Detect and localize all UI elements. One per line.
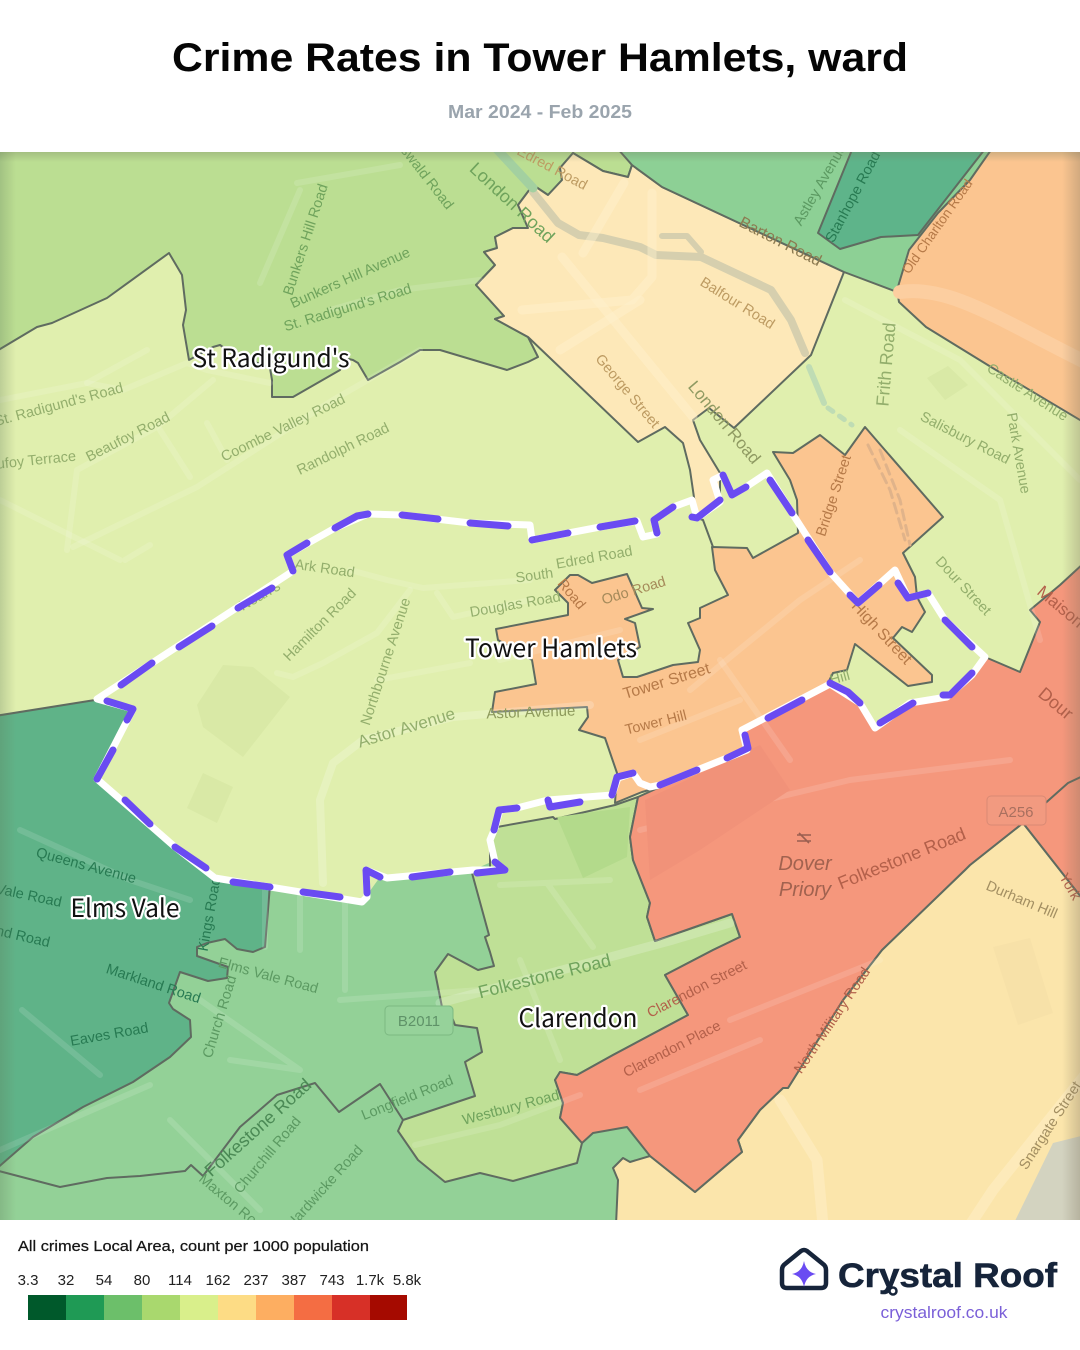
legend tick values [18, 1272, 422, 1289]
area: pale orange town ward [476, 153, 844, 518]
rail tracks in peach [868, 445, 910, 545]
road: Markland Road: Markland Road [104, 961, 202, 1007]
road: Edred Road south: Edred Road [555, 543, 634, 573]
road: Folkestone Road east: Folkestone Road [835, 824, 969, 893]
legend tick values: 5.8k [393, 1272, 422, 1289]
ward label: Elms Vale: Elms Vale [70, 889, 180, 925]
Tower Hamlets ward boundary [97, 473, 985, 902]
legend tick values: 32 [58, 1272, 74, 1289]
peach park path [900, 291, 1080, 362]
road: Eaves Road: Eaves Road [69, 1020, 150, 1050]
road shield: A256 [987, 796, 1046, 825]
area: peach Tower Hamlets part [492, 427, 943, 803]
legend title: All crimes Local Area, count per 1000 population [18, 1238, 369, 1255]
river through town [533, 192, 805, 353]
road: Astley Avenue: Astley Avenue [791, 141, 850, 229]
minor streets [0, 165, 1080, 1210]
road: Northbourne Avenue: Northbourne Avenue [358, 596, 414, 727]
river upstream in green ward [493, 145, 533, 188]
area: dark green Stanhope ward [817, 152, 984, 250]
Clarendon park patch [557, 807, 630, 878]
road: Longfield Road: Longfield Road [359, 1073, 456, 1124]
icon: railway station [797, 833, 811, 843]
road: Bridge Street: Bridge Street [814, 453, 855, 538]
road: Churchill Road: Churchill Road [231, 1114, 305, 1197]
road: Astor Avenue east: Astor Avenue [486, 702, 576, 723]
road: Folkestone Road west: Folkestone Road [201, 1075, 315, 1181]
road: London Road centre: London Road [684, 377, 764, 468]
road: South Road: South [515, 565, 554, 587]
road: High Street: High Street [848, 598, 915, 668]
Priory dark patch [646, 792, 786, 832]
road: Clarendon Place: Clarendon Place [621, 1018, 724, 1081]
road: Folkestone Road centre: Folkestone Road [476, 950, 613, 1002]
website url: crystalroof.co.uk [880, 1304, 1008, 1322]
road: Douglas Road: Douglas Road [469, 589, 562, 621]
map edge vignette [0, 152, 1080, 1220]
road: Edred Road north: Edred Road [514, 143, 590, 194]
ward label: Tower Hamlets: Tower Hamlets [465, 629, 637, 665]
road: Frith Road: Frith Road [872, 322, 900, 407]
area: medium green north ward [619, 152, 988, 292]
map base: light green wards [0, 254, 1080, 898]
road: Queens Avenue: Queens Avenue [34, 845, 138, 887]
ward label: St Radigund's: St Radigund's [192, 339, 350, 375]
area: ward line to the east edge [1046, 776, 1080, 804]
road: Dour Street: Dour Street [932, 554, 994, 619]
road shield: A256: A256 [998, 804, 1034, 821]
area: Clarendon light green ward [398, 797, 740, 1182]
legend colour scale [28, 1295, 407, 1320]
boundary dashes [97, 475, 972, 897]
station: Dover Priory [778, 833, 833, 901]
road: Clarendon Street: Clarendon Street [645, 957, 750, 1021]
legend [18, 1238, 422, 1320]
boundary casing [97, 473, 985, 902]
wordmark: Crystal Roof [838, 1257, 1058, 1295]
ward name labels [70, 339, 638, 1035]
legend tick values: 1.7k [356, 1272, 385, 1289]
icon: house with star [782, 1250, 826, 1288]
road: Kings Road: Kings Road [196, 876, 224, 953]
road shield: B2011: B2011 [398, 1013, 440, 1030]
road: Castle Avenue: Castle Avenue [984, 361, 1071, 425]
road: Church Road: Church Road [200, 974, 240, 1060]
logo: Crystal Roof [782, 1250, 1058, 1322]
river channel [662, 236, 701, 252]
area: Elms Vale dark green ward [0, 700, 270, 1170]
station name second line: Priory [779, 879, 832, 901]
road: Coombe Valley Road: Coombe Valley Road [219, 391, 348, 465]
legend tick values: 237 [243, 1272, 269, 1289]
ward label: Clarendon: Clarendon [518, 999, 638, 1035]
road: Bunkers Hill Avenue: Bunkers Hill Avenue [288, 245, 413, 312]
road: Elms Vale Road east: Elms Vale Road [216, 955, 320, 997]
subtitle: date range: Mar 2024 - Feb 2025 [448, 102, 632, 122]
road: Astor Avenue: Astor Avenue [355, 704, 457, 752]
pale patch south-east [993, 938, 1053, 1025]
river and rail details [0, 145, 1080, 1225]
legend tick values: 743 [319, 1272, 345, 1289]
station name: Dover [778, 853, 833, 875]
area: cream south-east ward [613, 823, 1080, 1225]
road: Tower Street: Tower Street [621, 660, 713, 703]
area: strip divider [700, 518, 714, 546]
road: Oswald Road: Oswald Road [390, 134, 456, 213]
road: Barton Road: Barton Road [736, 214, 824, 270]
road: Bunkers Hill Road: Bunkers Hill Road [281, 182, 332, 297]
road: Maxton Road: Maxton Road [195, 1171, 272, 1239]
road: Westbury Road: Westbury Road [461, 1088, 561, 1129]
road: Dour: Dour [1034, 683, 1077, 724]
river in light green area [809, 367, 824, 403]
pale town streets [522, 183, 693, 417]
road: St. Radigund's Road upper: St. Radigund's Road [282, 281, 414, 335]
legend tick values: 162 [205, 1272, 231, 1289]
road: Noah's Ark Road right: Ark Road [294, 557, 356, 581]
road: Noah's Ark Road left: Noah's [237, 578, 283, 615]
road: Stanhope Road: Stanhope Road [823, 149, 884, 245]
road: Odo Road: Odo Road [600, 574, 668, 608]
park patches [187, 366, 968, 823]
road: Hamilton Road: Hamilton Road [281, 586, 360, 665]
legend tick values: 54 [96, 1272, 112, 1289]
area: north-west green ward [0, 140, 632, 397]
road: Hill fragment: Hill [828, 668, 852, 688]
road: Durham Hill: Durham Hill [984, 878, 1060, 922]
legend tick values: 387 [281, 1272, 307, 1289]
area: inner green ward line [0, 1083, 403, 1187]
road: Salisbury Road: Salisbury Road [917, 409, 1012, 468]
road: Randolph Road: Randolph Road [294, 420, 392, 479]
legend tick values: 114 [168, 1272, 192, 1289]
road: Balfour Road: Balfour Road [697, 274, 777, 333]
icon: key on the letter y [890, 1288, 896, 1294]
road: Beaufoy Road: Beaufoy Road [84, 409, 173, 465]
river dots [828, 408, 852, 425]
road: Hardwicke Road: Hardwicke Road [283, 1142, 367, 1232]
legend tick values: 3.3 [18, 1272, 38, 1289]
title: Crime Rates in Tower Hamlets, ward [172, 36, 908, 80]
area: salmon Priory ward [555, 562, 1080, 1192]
road: Old Charlton Road: Old Charlton Road [899, 176, 976, 277]
legend tick values: 80 [134, 1272, 150, 1289]
road: North Military Road: North Military Road [791, 965, 874, 1077]
road: London Road north: London Road [466, 158, 558, 247]
road: South Road continued: Road [554, 576, 588, 613]
road: George Street: George Street [592, 351, 662, 431]
area: peach north-east ward [897, 140, 1080, 423]
area: medium green south ward [0, 863, 648, 1220]
gray built patch south-east [1016, 1136, 1080, 1220]
cream roads south-east [780, 1075, 1080, 1225]
road shield: B2011 [385, 1006, 453, 1035]
road: Park Avenue: Park Avenue [1003, 412, 1033, 495]
road: Tower Hill: Tower Hill [624, 708, 688, 738]
